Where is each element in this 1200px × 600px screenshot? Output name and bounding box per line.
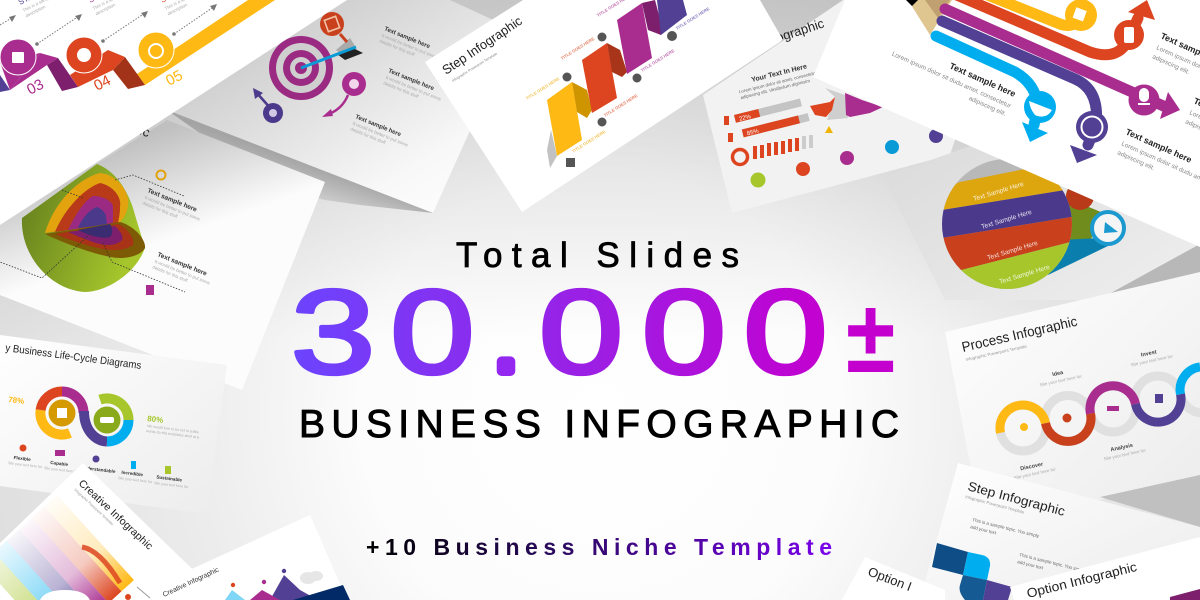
- map: [810, 88, 883, 133]
- heading: step title: Step Infographic: [439, 13, 525, 77]
- item icons: [20, 444, 171, 474]
- item labels: Sustainable: [156, 474, 183, 483]
- text block: your text: Lorem ipsum dolor sit amet, consectetur: [738, 70, 818, 94]
- icon: pencil tip: [906, 0, 952, 35]
- chart: folded step ribbon: [547, 0, 687, 156]
- panel: creative slide left: [0, 463, 220, 600]
- chart: bars: 85%: [746, 128, 760, 137]
- heading: map slide title: Infographic: [760, 15, 826, 50]
- step numbers: 03: [24, 76, 47, 99]
- chart: bars: [734, 98, 810, 139]
- captions: TITLE GOES HERE: [560, 36, 595, 61]
- chart: folded ribbon: [0, 0, 275, 92]
- heading: total slides: Total Slides: [456, 236, 739, 275]
- indigo ribbon: [942, 21, 1108, 163]
- stats: 80%: [147, 414, 164, 425]
- connector blob: [40, 590, 90, 600]
- panel: option slide right: [1010, 537, 1200, 600]
- shadow below target slide: [167, 110, 433, 213]
- chart: back wedges: [1048, 182, 1110, 275]
- heading: step title: Step Infographic: [966, 478, 1067, 519]
- shadow beside sphere slide: [1085, 240, 1200, 300]
- text block: sphere notes: It would be better to put some: [144, 195, 201, 222]
- panel: creative slide right: [152, 515, 350, 600]
- text block: target notes: It would be better to put some: [385, 75, 442, 102]
- captions: TITLE GOES HERE: [675, 6, 710, 31]
- panel: stair slide: [0, 0, 347, 225]
- heading: Option I: [866, 564, 914, 594]
- text block: left note: Lorem ipsum dolor sit dudu amet, consectetur: [891, 51, 1013, 110]
- text block: your text: [736, 61, 819, 100]
- text block: sphere notes: [142, 187, 214, 291]
- item labels: [13, 455, 183, 483]
- text block: left note: Text sample here: [948, 61, 1017, 99]
- text block: target notes: Text sample here: [387, 68, 435, 92]
- icon: target board with arrow: [269, 12, 363, 100]
- text block: target notes: Text sample here: [383, 26, 431, 50]
- dark blue corner: [293, 585, 350, 600]
- icon: yellow face: [156, 170, 166, 180]
- panel: step infographic slide: [425, 0, 783, 212]
- chart: people row: [753, 135, 813, 159]
- icons: wave icons: [1020, 394, 1163, 431]
- text block: target notes: It would be better to put some: [352, 121, 409, 148]
- item copy: Site your text here for: [8, 461, 43, 469]
- text block: sphere notes: Text sample here: [156, 251, 208, 278]
- panel: life-cycle slide: [0, 335, 227, 514]
- labels: Idea: [1052, 370, 1065, 378]
- text block: target notes: details for this stuff: [383, 80, 420, 99]
- shadow below process slide: [1100, 475, 1200, 527]
- chart: donut: [732, 150, 748, 164]
- chart: peak markers: [225, 569, 318, 600]
- icons: person markers: [724, 116, 733, 142]
- panel: pencil slide: [813, 0, 1200, 247]
- captions: [525, 0, 710, 154]
- subtitle: Infographic Powerpoint Template: [451, 52, 498, 83]
- icon: blue ring: [1092, 212, 1124, 244]
- text: sphere labels: Text Sample Here: [999, 264, 1051, 286]
- text block: target notes: [350, 26, 445, 153]
- text block: target notes: details for this stuff: [350, 126, 387, 145]
- arrowheads: [9, 4, 217, 46]
- item copy: Site your text here for: [44, 466, 79, 474]
- text block: left note: adipiscing elit.: [968, 95, 1007, 118]
- subtitle: Infographic Powerpoint Template: [965, 494, 1026, 515]
- big number: 30000: [291, 265, 828, 398]
- icons: small dark glyphs: [562, 31, 677, 167]
- icons: option circles: [750, 129, 943, 188]
- item labels: Incredible: [121, 470, 144, 477]
- dotted arrows: [0, 8, 212, 44]
- icon: magenta badge: [146, 285, 154, 295]
- item labels: Flexible: [13, 455, 31, 462]
- heading: creative title: Creative Infographic: [76, 477, 155, 552]
- item copy: words do this templates shell at a: [146, 429, 199, 439]
- icon: magenta curved arrow: [322, 72, 366, 117]
- step numbers: 04: [91, 72, 114, 95]
- notes: add your text: [1017, 559, 1044, 571]
- icon: right hub: [94, 406, 120, 434]
- text block: middle note: Text sample here: [1124, 127, 1193, 165]
- text: sphere labels: Text Sample Here: [973, 181, 1025, 203]
- heading: life-cycle title: y Business Life-Cycle Diagrams: [5, 342, 142, 372]
- captions: TITLE GOES HERE: [603, 93, 638, 118]
- heading: creative title: Creative Infographic: [162, 566, 221, 599]
- item copy: [8, 424, 199, 489]
- labels: Discover: [1020, 461, 1045, 472]
- text block: your text: Your Text In Here: [751, 63, 808, 84]
- cyan ribbon: [936, 36, 1056, 142]
- labels: [1013, 349, 1174, 480]
- notes: [970, 517, 1087, 574]
- subtitle: Infographic Powerpoint Template: [965, 343, 1028, 362]
- text block: right note: [1184, 96, 1200, 141]
- text block: sphere notes: It would be better to put some: [154, 259, 211, 286]
- chart: infinity rings: [40, 391, 129, 442]
- chart: puzzle blocks: [932, 543, 1012, 600]
- captions: TITLE GOES HERE: [640, 48, 675, 73]
- labels: Site your text here for: [1103, 448, 1147, 461]
- subtitle: Infographic Powerpoint Template: [73, 488, 114, 526]
- notes: add your text: [970, 524, 997, 536]
- cloud: [300, 571, 323, 584]
- heading: business infographic: BUSINESS INFOGRAPHIC: [299, 403, 899, 446]
- decimal point: .: [494, 291, 519, 391]
- text block: your text: adipiscing elit. Vestibulum dignissim: [740, 78, 811, 100]
- icon: step 03 circle: [0, 39, 36, 75]
- panel: process slide: [945, 272, 1200, 510]
- text block: target notes: Text sample here: [354, 114, 402, 138]
- step numbers: 05: [163, 67, 186, 90]
- connector line: [137, 587, 150, 598]
- icon: indigo arrow: [253, 88, 283, 123]
- item copy: Site your text here for: [118, 476, 153, 484]
- icon: step 05 circle: [138, 32, 174, 68]
- yellow ribbon: [980, 0, 1097, 31]
- labels: Site your text here for: [1039, 374, 1083, 387]
- chart: banded sphere: [942, 160, 1072, 289]
- panel: sphere slide: [933, 146, 1197, 299]
- magenta ribbon: [945, 9, 1180, 119]
- text block: target notes: details for this stuff: [379, 38, 416, 57]
- item labels: Capable: [50, 460, 69, 467]
- icon: step 04 circle: [66, 37, 102, 73]
- red marker: [125, 594, 131, 600]
- text: sphere labels: Text Sample Here: [987, 240, 1039, 262]
- labels: Site your text here for: [1130, 354, 1174, 367]
- chart: fading stripes: [0, 495, 134, 600]
- shadow under ribbon: [547, 130, 557, 168]
- panel: heart sphere slide: [0, 120, 325, 390]
- text block: target notes: It would be better to put some: [381, 33, 438, 60]
- chart: layered half sphere: [22, 164, 145, 292]
- text block: top right note: adipiscing elit.: [1151, 53, 1191, 76]
- item copy: We would love to be set in a little: [147, 424, 199, 434]
- chart: bars: 22%: [739, 114, 752, 123]
- heading: Option Infographic: [1025, 559, 1139, 600]
- captions: TITLE GOES HERE: [525, 76, 560, 101]
- block: [1170, 589, 1200, 600]
- icon: left hub: [48, 400, 76, 426]
- plus minus sign: ±: [846, 280, 895, 394]
- step captions: [17, 0, 198, 18]
- text block: sphere notes: details for this stuff: [152, 264, 189, 283]
- step captions: description: [25, 4, 47, 18]
- callout lines: [0, 175, 185, 292]
- item copy: Site your text here for: [154, 481, 189, 489]
- panel: map slide: [703, 0, 1000, 213]
- notes: This is a sample topic. You simply: [972, 517, 1040, 539]
- panel: target slide: [167, 0, 515, 213]
- labels: Site your text here for: [1013, 467, 1057, 480]
- text block: sphere notes: details for this stuff: [142, 200, 179, 219]
- text block: sphere notes: Text sample here: [146, 187, 198, 214]
- orange ribbon: [945, 0, 1155, 55]
- text block: middle note: adipiscing elit.: [1116, 149, 1156, 172]
- background top shade: [0, 0, 1200, 340]
- chart: wave rings: [1000, 367, 1200, 451]
- panel: option slide left: [842, 557, 945, 600]
- step numbers: [24, 67, 186, 99]
- heading: slide title fragment: ic: [138, 123, 152, 140]
- step captions: description: [167, 2, 189, 16]
- labels: Invest: [1140, 349, 1157, 359]
- stats: 78%: [8, 395, 25, 406]
- item labels: Understandable: [81, 465, 116, 474]
- text: sphere labels: [973, 181, 1051, 286]
- labels: Analysis: [1110, 443, 1133, 453]
- panel: step slide lower right: [920, 463, 1200, 600]
- tagline: +10 Business Niche Template: [366, 534, 832, 560]
- notes: This is a sample topic. You simply: [1019, 552, 1087, 574]
- step captions: description: [95, 2, 117, 16]
- text: sphere labels: Text Sample Here: [981, 209, 1033, 231]
- heading: process title: Process Infographic: [960, 313, 1079, 355]
- text block: top right note: [1151, 31, 1200, 89]
- captions: TITLE GOES HERE: [571, 129, 606, 154]
